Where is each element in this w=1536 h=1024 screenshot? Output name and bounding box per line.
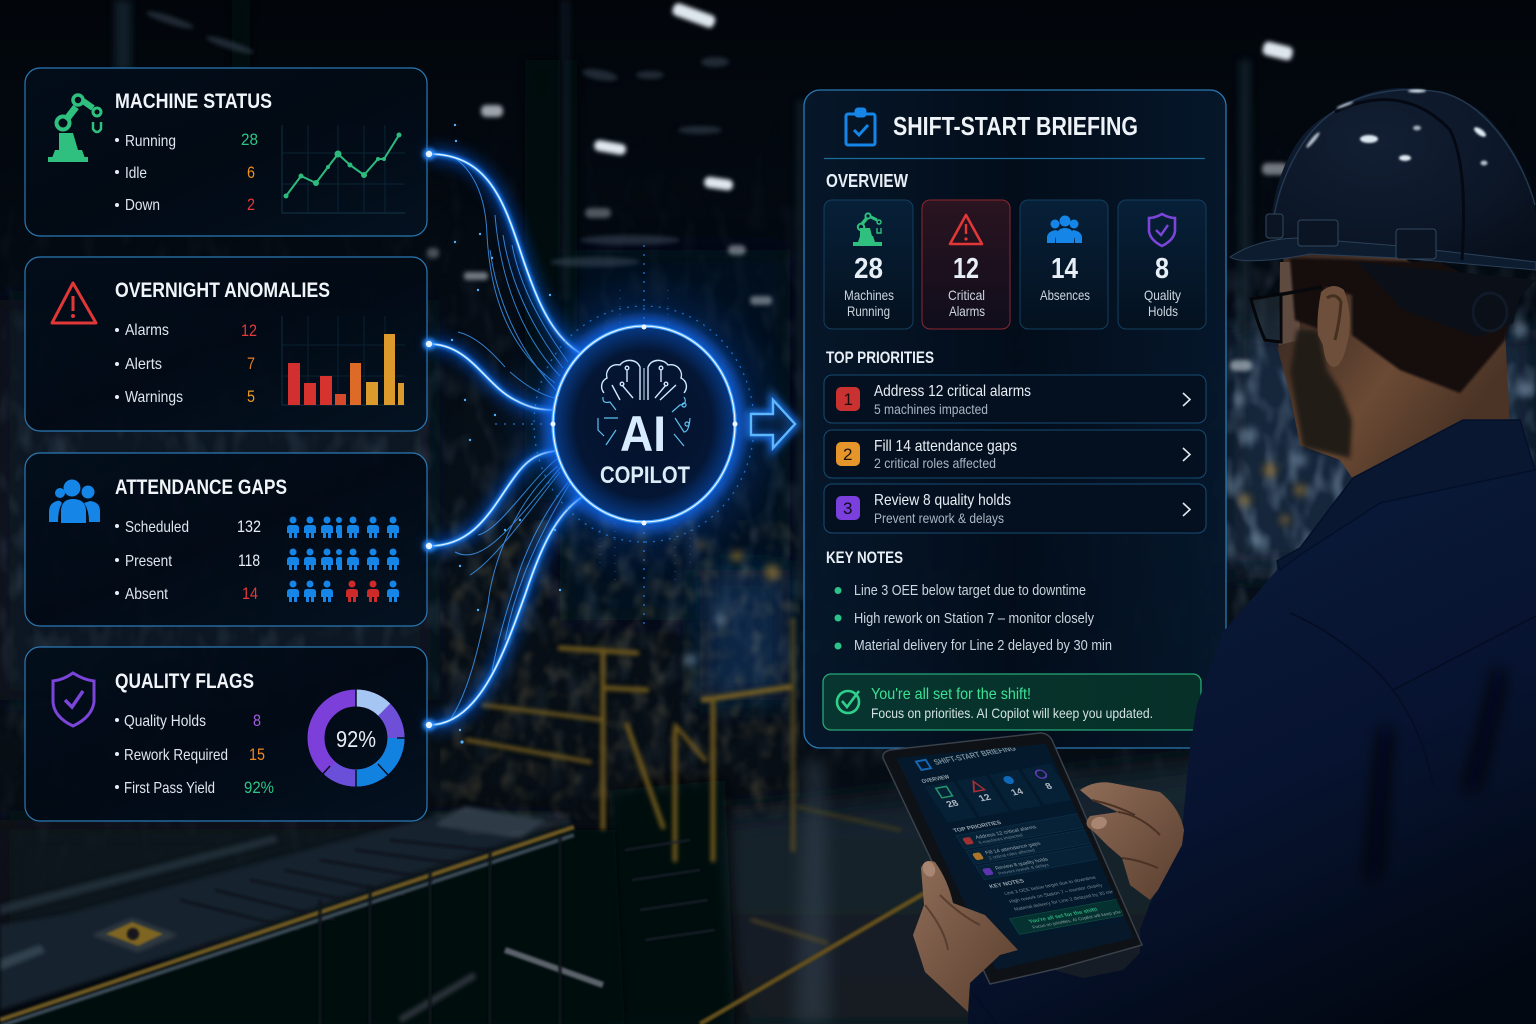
priority 2: 2 — [843, 445, 852, 464]
tablet screen: mini briefing — [914, 747, 1124, 935]
label: quality holds: Quality — [1144, 287, 1181, 303]
tablet screen: mini briefing: Line 3 OEE below target due to downtime — [1003, 875, 1098, 897]
label: absences: Absences — [1040, 287, 1090, 303]
quality list — [115, 711, 274, 797]
donut chart: first pass yield — [316, 689, 405, 788]
priority 1 — [824, 375, 1206, 423]
card: quality holds — [1118, 200, 1206, 329]
callout: ready for shift — [823, 674, 1201, 730]
line chart: machine trend — [282, 125, 405, 213]
tablet screen: mini briefing: Address 12 critical alarms — [974, 825, 1038, 841]
tablet screen: mini briefing: 28 — [944, 798, 962, 810]
card: machines running — [824, 200, 913, 329]
quality list: Quality Holds — [124, 713, 206, 730]
tablet screen: mini briefing: Prevent rework & delays — [997, 862, 1051, 876]
tablet screen: mini briefing: 2 critical roles affected — [988, 848, 1036, 860]
panel: shift-start briefing — [804, 90, 1226, 748]
icon: shield with check — [53, 673, 94, 726]
tablet screen: mini briefing: 12 — [977, 793, 993, 804]
conveyor — [0, 806, 715, 1024]
panel: machine status — [25, 68, 427, 236]
label: machines running: Running — [847, 303, 890, 319]
status list: 2 — [247, 195, 255, 214]
label: critical alarms: Critical — [948, 287, 985, 303]
key notes list: Line 3 OEE below target due to downtime — [854, 582, 1086, 599]
arrow: toward briefing — [751, 400, 795, 448]
anomalies list: Warnings — [125, 389, 183, 406]
worker: hands holding tablet — [913, 782, 1184, 1012]
heading: quality flags: QUALITY FLAGS — [115, 670, 254, 693]
label: critical alarms: Alarms — [949, 303, 985, 319]
worker: jacket — [968, 420, 1536, 1024]
neck and face — [1278, 250, 1510, 482]
tablet screen: mini briefing: OVERVIEW — [921, 775, 951, 785]
anomalies list — [115, 321, 257, 406]
priority 1: 1 — [844, 390, 853, 409]
icon: green check — [837, 691, 859, 713]
label: critical alarms — [948, 287, 985, 319]
icon: warning triangle — [52, 283, 96, 323]
priority 3 — [824, 484, 1206, 533]
tablet screen: mini briefing: Review 8 quality holds — [994, 857, 1050, 872]
icon: circuit brain — [598, 360, 690, 446]
pictogram chart: workers present and absent — [287, 516, 399, 602]
value: 14: 14 — [1051, 253, 1078, 285]
tablet screen: mini briefing: Fill 14 attendance gaps — [984, 841, 1042, 856]
hand: right side fingers — [1080, 782, 1184, 900]
heading: attendance gaps: ATTENDANCE GAPS — [115, 476, 287, 499]
floor — [690, 730, 1536, 1024]
card: critical alarms — [922, 200, 1010, 329]
priority 2: Fill 14 attendance gaps — [874, 438, 1017, 455]
icon: warning triangle small — [950, 215, 982, 244]
priority 3: Review 8 quality holds — [874, 492, 1011, 509]
attendance list — [115, 517, 261, 603]
status list: Down — [125, 197, 160, 214]
icon: shield small — [1149, 214, 1175, 246]
icon: clipboard check — [846, 109, 875, 145]
key notes list: Material delivery for Line 2 delayed by 30 min — [854, 637, 1112, 654]
tablet screen: mini briefing: Focus on priorities. AI Copilot will keep you updated. — [1031, 906, 1141, 930]
hand: left side thumb and palm — [913, 859, 1018, 1012]
heading: overnight anomalies: OVERNIGHT ANOMALIES — [115, 279, 330, 302]
attendance list: 132 — [237, 517, 261, 536]
tablet screen: mini briefing: Material delivery for Line 2 delayed by 30 min — [1013, 889, 1116, 912]
callout: ready for shift: You're all set for the shift! — [871, 686, 1031, 703]
anomalies list: 7 — [247, 354, 255, 373]
data streams: connectors into the AI copilot — [423, 124, 582, 744]
label: machines running: Machines — [844, 287, 894, 303]
priority 2 — [824, 430, 1206, 478]
quality list: First Pass Yield — [124, 780, 215, 797]
priority 2: 2 critical roles affected — [874, 455, 996, 471]
anomalies list: 5 — [247, 387, 255, 406]
icon: group small — [1047, 216, 1082, 243]
value: 12: 12 — [953, 253, 979, 285]
status list: Running — [125, 133, 176, 150]
card: absences — [1020, 200, 1108, 329]
label: machines running — [844, 287, 894, 319]
anomalies list: Alerts — [125, 356, 162, 373]
icon: group of people — [49, 480, 100, 523]
tablet — [883, 732, 1156, 984]
heading: key notes: KEY NOTES — [826, 548, 903, 567]
panel: quality flags — [25, 647, 427, 821]
status list — [115, 130, 258, 214]
status list: Idle — [125, 165, 147, 182]
panel: attendance gaps — [25, 453, 427, 626]
label: quality holds — [1144, 287, 1181, 319]
worker: head and helmet — [1230, 88, 1536, 482]
icon: robot arm small — [853, 213, 882, 246]
attendance list: Scheduled — [125, 519, 189, 536]
tablet screen: mini briefing: 14 — [1009, 787, 1026, 798]
stairs — [610, 780, 735, 1024]
heading: overview: OVERVIEW — [826, 171, 908, 191]
tablet screen: mini briefing: TOP PRIORITIES — [952, 820, 1003, 834]
value: 8: 8 — [1155, 253, 1169, 285]
anomalies list: 12 — [241, 321, 257, 340]
anomalies list: Alarms — [125, 322, 169, 339]
icon: robot arm — [48, 95, 101, 162]
label: quality holds: Holds — [1148, 303, 1178, 319]
quality list: 92% — [244, 778, 274, 797]
tablet screen: mini briefing: 5 machines impacted — [978, 833, 1024, 845]
attendance list: Present — [125, 553, 172, 570]
yellow scaffold — [467, 620, 900, 943]
callout: ready for shift: Focus on priorities. AI Copilot will keep you updated. — [871, 705, 1153, 721]
attendance list: 118 — [238, 551, 260, 570]
priority 1: 5 machines impacted — [874, 401, 988, 417]
heading: machine status: MACHINE STATUS — [115, 90, 272, 113]
key notes list: High rework on Station 7 – monitor closely — [854, 610, 1094, 627]
text: AI: AI — [620, 406, 666, 462]
attendance list: Absent — [125, 586, 168, 603]
quality list: 8 — [253, 711, 261, 730]
donut value: 92% — [336, 726, 376, 752]
tablet screen: mini briefing: High rework on Station 7 – monitor closely — [1008, 883, 1104, 905]
bar chart: anomalies — [282, 316, 405, 405]
key notes list — [834, 582, 1112, 654]
priority 3: Prevent rework & delays — [874, 510, 1004, 526]
quality list: Rework Required — [124, 747, 228, 764]
quality list: 15 — [249, 745, 265, 764]
tablet screen: mini briefing: SHIFT-START BRIEFING — [932, 743, 1018, 766]
heading: shift-start briefing: SHIFT-START BRIEFING — [893, 111, 1138, 141]
tablet screen: mini briefing: KEY NOTES — [988, 879, 1026, 890]
status list: 28 — [241, 130, 258, 149]
helmet — [1230, 88, 1536, 270]
attendance list: 14 — [242, 584, 258, 603]
tablet screen: mini briefing: 8 — [1043, 781, 1055, 792]
tablet screen: mini briefing: You're all set for the shift! — [1028, 907, 1100, 925]
text: copilot: COPILOT — [600, 462, 690, 489]
panel: overnight anomalies — [25, 257, 427, 431]
heading: top priorities: TOP PRIORITIES — [826, 348, 934, 367]
value: 28: 28 — [854, 253, 883, 285]
priority 1: Address 12 critical alarms — [874, 383, 1031, 400]
status list: 6 — [247, 163, 255, 182]
priority 3: 3 — [843, 499, 852, 518]
AI copilot hub — [495, 245, 774, 625]
